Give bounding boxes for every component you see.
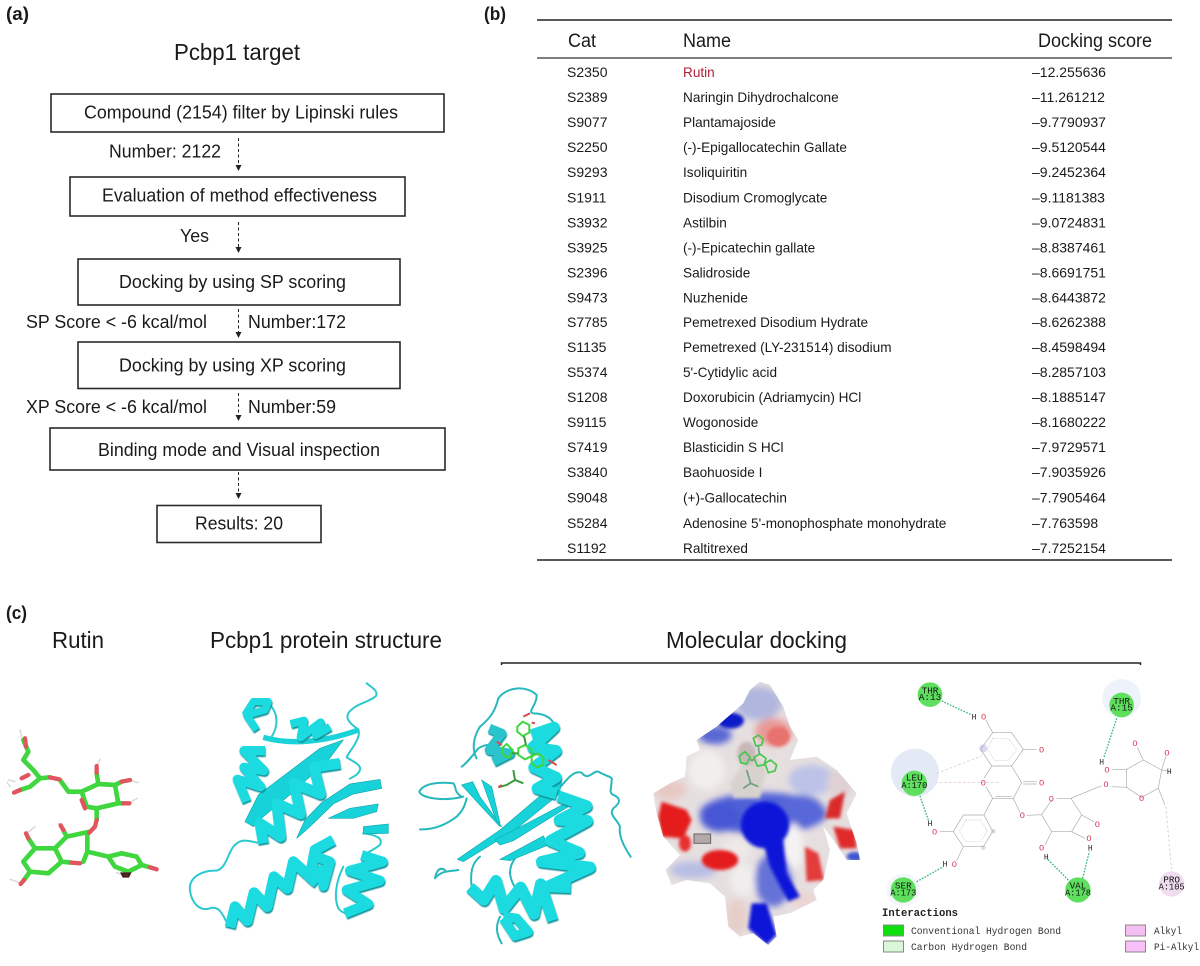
atom labels: O [1086,834,1092,844]
table rows: S5374 [567,364,608,380]
table rows: (-)-Epigallocatechin Gallate [683,140,847,155]
table rows: Disodium Cromoglycate [683,190,827,206]
flowchart title: Pcbp1 target [174,39,300,65]
arrow 3 with SP threshold: SP Score < -6 kcal/mol [26,311,207,332]
residue: THR A:15 [1109,693,1134,717]
step: binding mode: Binding mode and Visual inspection [98,439,380,460]
table rows: –11.261212 [1032,89,1105,105]
table rows: Pemetrexed Disodium Hydrate [683,315,868,330]
table rows: S1208 [567,389,608,405]
residue: VAL A:178: VAL [1070,880,1087,891]
step: XP docking: Docking by using XP scoring [119,354,346,376]
heading: protein structure: Pcbp1 protein structure [210,627,442,653]
table rows: –8.2857103 [1032,364,1106,380]
table rows: –8.6691751 [1032,264,1106,280]
docking score table [537,20,1172,560]
table rows: (-)-Epicatechin gallate [683,240,815,256]
table rows: Adenosine 5'-monophosphate monohydrate [683,516,946,531]
atom labels: O [932,827,937,837]
residue: THR A:15: THR [1113,696,1130,707]
table rows: –8.4598494 [1032,339,1106,355]
residue: LEU A:170 [901,771,928,796]
table rows: Pemetrexed (LY-231514) disodium [683,340,892,355]
residue: SER A:173: A:173 [890,888,916,899]
table rows: S2350 [567,64,608,80]
atom labels: O [1049,795,1054,805]
table rows: –8.6262388 [1032,314,1106,330]
step: results [157,506,321,542]
arrow 4 with XP threshold [26,393,336,421]
legend: carbon H bond: Carbon Hydrogen Bond [911,942,1027,954]
interactions legend [882,908,1199,954]
panel label (b): (b) [484,4,506,24]
panel label (c): (c) [6,603,27,623]
table rows: S3932 [567,214,608,230]
residue: PRO A:105: PRO [1163,874,1180,885]
table header [568,31,1152,52]
table rows: Baohuoside I [683,465,762,480]
interaction bonds [917,701,1172,882]
ligand in pocket [739,735,777,788]
residue: THR A:13: A:13 [919,692,941,703]
atom labels: H [972,713,977,722]
heading: molecular docking: Molecular docking [666,627,847,653]
table rows: S9115 [567,414,607,430]
arrow 5 [236,472,242,499]
atom labels: O [1132,739,1138,749]
2D interaction diagram [887,679,1185,907]
ligand skeleton [940,720,1168,861]
arrow 4 with XP threshold: XP Score < -6 kcal/mol [26,396,207,417]
molecular docking bracket [502,663,1140,665]
legend: pi-alkyl [1126,941,1199,954]
helices [470,727,590,936]
table rows: S1192 [567,540,607,556]
legend title: Interactions [882,908,958,920]
arrow 3 with SP threshold [26,309,346,338]
residue: LEU A:170: A:170 [901,780,928,791]
atom labels: O [1103,780,1109,790]
table header: Cat [568,31,597,52]
arrow 1 with count [109,138,242,171]
atom labels: O [1020,811,1025,821]
electrostatic surface [647,677,867,950]
atom labels: O [1164,749,1170,759]
sheets [457,780,577,862]
table rows: Blasticidin S HCl [683,440,783,455]
unstructured loops [190,683,381,925]
table rows: –7.763598 [1032,515,1098,531]
step: XP docking [78,342,400,388]
table rows: Naringin Dihydrochalcone [683,90,839,105]
step: evaluation [70,177,405,216]
helices [230,702,383,927]
atom labels: H [1088,844,1093,853]
protein ribbon structure [190,683,388,927]
residue: LEU A:170: LEU [906,773,923,784]
atom labels: H [1167,768,1172,777]
arrow 4 with XP threshold: Number:59 [248,396,336,417]
step: results: Results: 20 [195,512,283,534]
step: SP docking [78,259,400,305]
table rows: S2389 [567,89,608,105]
table rows: (+)-Gallocatechin [683,490,787,506]
table rows: Plantamajoside [683,115,776,130]
table rows: S2250 [567,139,608,155]
atom labels: O [1139,794,1144,804]
legend: alkyl: Alkyl [1154,926,1182,938]
atom labels: H [1044,853,1049,862]
table rows: 5'-Cytidylic acid [683,365,777,380]
atom labels: O [1039,844,1044,854]
table rows: S1911 [567,190,607,206]
table header: Docking score [1038,31,1152,52]
flowchart [26,94,445,542]
step: SP docking: Docking by using SP scoring [119,271,346,292]
ligand [497,713,557,787]
table rows: –7.7252154 [1032,540,1106,556]
table rows: S7785 [567,314,608,330]
table rows: S2396 [567,264,608,280]
heading: Rutin: Rutin [52,627,104,653]
table rows: –7.9729571 [1032,439,1106,455]
table rows: –9.2452364 [1032,164,1106,180]
table rows: Raltitrexed [683,541,748,556]
table rows: Wogonoside [683,415,758,430]
loops [419,688,631,943]
atom labels: O [1104,766,1110,776]
atom labels: O [1039,745,1044,755]
table header: Name [683,31,731,52]
table rows: –8.8387461 [1032,240,1106,256]
atom labels: H [928,820,933,829]
table rows: –9.1181383 [1032,190,1105,206]
table rows: –12.255636 [1032,64,1106,80]
table rows: S9293 [567,164,608,180]
table rows: S9473 [567,290,608,306]
atom labels: H [1099,758,1104,767]
residue: PRO A:105: A:105 [1159,882,1185,893]
table rows: S3840 [567,464,608,480]
table rows: Nuzhenide [683,290,748,306]
step: Lipinski filter [51,94,444,132]
residue: THR A:13: THR [922,685,939,696]
table rows: –7.9035926 [1032,464,1106,480]
beta sheets [245,740,388,838]
atom labels: O [1039,778,1044,788]
docked ribbon complex [419,688,631,943]
step: Lipinski filter: Compound (2154) filter by Lipinski rules [84,102,398,122]
table rows: –9.5120544 [1032,139,1106,155]
atom labels: H [943,861,948,870]
residue: SER A:173 [890,877,916,903]
table rows: S9077 [567,114,608,130]
residue: THR A:15: A:15 [1110,703,1133,714]
step: binding mode [50,428,445,470]
residue: PRO A:105 [1159,871,1185,897]
arrow 1 with count: Number: 2122 [109,140,221,162]
table rows: S9048 [567,490,608,506]
table rows: –8.6443872 [1032,290,1106,306]
table rows [567,64,1106,556]
table rows: Doxorubicin (Adriamycin) HCl [683,390,861,405]
table rows: Salidroside [683,266,750,280]
hydrophobic halos [887,679,1141,907]
rutin stick model [7,730,157,884]
atom labels [928,712,1172,870]
table rows: –7.7905464 [1032,490,1106,506]
residue: SER A:173: SER [895,880,912,891]
table rows: –8.1680222 [1032,414,1106,430]
table rows: –9.7790937 [1032,114,1106,130]
table rows: S5284 [567,515,608,531]
table rows: S3925 [567,240,608,256]
table rows: Isoliquiritin [683,165,747,180]
legend: alkyl [1126,925,1182,938]
residue: VAL A:178: A:178 [1065,888,1091,899]
atom labels: O [1095,820,1100,830]
atom labels: O [981,778,986,788]
table rows: –8.1885147 [1032,389,1106,405]
table rows: S7419 [567,439,608,455]
table rows: –9.0724831 [1032,214,1106,230]
residue: THR A:13 [918,682,942,707]
arrow 2 with Yes [180,222,242,253]
atom labels: O [952,860,957,870]
arrow 2 with Yes: Yes [180,225,209,246]
table rows: S1135 [567,339,607,355]
panel label (a): (a) [6,4,29,24]
legend: conventional H bond: Conventional Hydrogen Bond [911,926,1061,938]
table rows: Rutin [683,65,715,80]
atom labels: O [981,712,986,722]
table rows: Astilbin [683,216,727,230]
residue: VAL A:178 [1065,877,1091,903]
step: evaluation: Evaluation of method effectiveness [102,184,377,206]
arrow 3 with SP threshold: Number:172 [248,311,346,332]
